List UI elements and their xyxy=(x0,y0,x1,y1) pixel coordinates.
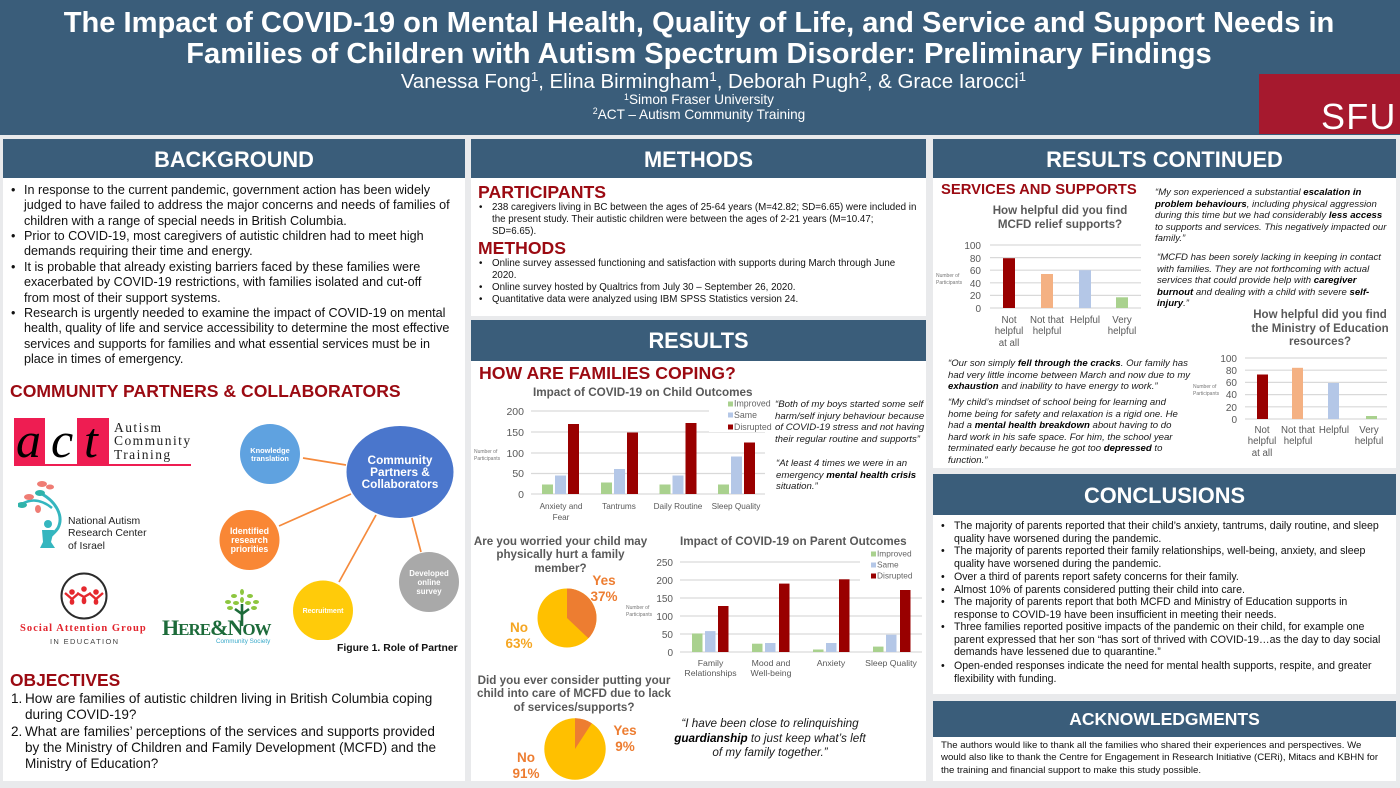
question: care of MCFD: child into care of MCFD due to lack xyxy=(477,687,671,700)
bar chart: MCFD relief supports xyxy=(936,241,1141,349)
bar chart: parent outcomes: Relationships xyxy=(684,668,737,678)
bar chart: MCFD relief supports: 80 xyxy=(970,254,981,265)
bar chart: MCFD relief supports: 40 xyxy=(970,279,981,290)
community partners heading: COMMUNITY PARTNERS & COLLABORATORS xyxy=(10,381,401,401)
panel: conclusions body: • xyxy=(941,584,945,596)
participants text: 238 caregivers living in BC between the ages of 25-64 years (M=42.82; SD=6.65) were included in xyxy=(492,202,916,213)
quote: self harm: of COVID-19 stress and not having xyxy=(775,422,924,433)
question: worried: Are you worried your child may xyxy=(474,534,647,548)
how are families coping heading: HOW ARE FAMILIES COPING? xyxy=(479,363,736,383)
quote: fell through the cracks: had very little income between March and now due to my xyxy=(948,370,1190,381)
background bullet list: Prior to COVID-19, most caregivers of autistic children had to meet high xyxy=(24,229,424,243)
background bullet list: place in times of emergency. xyxy=(24,352,183,366)
node: community partners and collaborators: Community xyxy=(368,453,433,467)
panel: conclusions body xyxy=(933,515,1396,694)
panel: results heading: RESULTS xyxy=(648,328,749,353)
bar chart: child outcomes: 200 xyxy=(506,406,524,418)
quote: mental health breakdown: “My child’s mindset of school being for learning and xyxy=(948,397,1166,408)
bar chart: parent outcomes: 150 xyxy=(656,594,673,605)
node: knowledge translation xyxy=(240,424,300,484)
panel: conclusions body: quality have worsened during the pandemic. xyxy=(954,558,1161,570)
bar chart: child outcomes: Anxiety and xyxy=(540,502,583,511)
SFU logo xyxy=(1259,74,1400,134)
acknowledgments text xyxy=(941,740,1378,776)
background bullet list xyxy=(11,183,450,366)
pie chart: care of MCFD: Yes xyxy=(613,723,637,738)
logo: Social Attention Group in Education xyxy=(20,572,147,646)
logo: Here and Now Community Society xyxy=(162,589,272,645)
logo: National Autism Research Center of Israel: National Autism xyxy=(68,516,140,526)
panel: methods heading xyxy=(471,139,926,178)
bar chart: Ministry of Education resources: 40 xyxy=(1226,390,1237,401)
quote: self harm xyxy=(775,399,924,445)
quote: guardianship: “I have been close to relinquishing xyxy=(681,717,859,730)
chart title: Ministry of Education: resources? xyxy=(1289,336,1351,348)
node: knowledge translation: translation xyxy=(251,454,289,463)
bar chart: child outcomes: 50 xyxy=(512,468,524,480)
bar chart: MCFD relief supports: 60 xyxy=(970,266,981,277)
quote: mental health breakdown: had a mental health breakdown about having to do xyxy=(948,420,1171,431)
panel: results continued heading: RESULTS CONTINUED xyxy=(1046,147,1283,172)
quote: escalation: during this time but we had considerably less access xyxy=(1155,210,1382,221)
title xyxy=(64,7,1334,70)
logo: Here and Now Community Society: Community Society xyxy=(216,638,270,645)
bar chart: parent outcomes: 250 xyxy=(656,558,673,569)
panel: results heading xyxy=(471,320,926,361)
title: Families of Children with Autism Spectrum Disorder: Preliminary Findings xyxy=(186,38,1212,70)
node: identified research priorities: priorities xyxy=(231,544,268,554)
bar chart: parent outcomes: Well-being xyxy=(751,668,792,678)
bar chart: child outcomes: Tantrums xyxy=(602,502,636,511)
objectives list: Ministry of Education? xyxy=(25,756,158,771)
panel: conclusions body: demands have lessened due to quarantine.” xyxy=(954,646,1161,658)
panel: conclusions body: • xyxy=(941,571,945,583)
bar chart: MCFD relief supports: 0 xyxy=(975,304,981,315)
logo: ACT Autism Community Training: t xyxy=(84,412,98,468)
chart title: child outcomes: Impact of COVID-19 on Child Outcomes xyxy=(533,386,752,399)
panel: background heading xyxy=(3,139,465,178)
logo: ACT Autism Community Training xyxy=(14,412,192,468)
question: care of MCFD xyxy=(477,674,671,714)
quote: guardianship xyxy=(674,717,866,759)
bar chart: parent outcomes: Mood and xyxy=(752,658,790,668)
bar chart: MCFD relief supports: helpful xyxy=(995,326,1023,337)
acknowledgments text: would also like to thank the Centre for Engagement in Research Initiative (CERi), Mitacs and KBHN for xyxy=(941,752,1378,763)
bar chart: Ministry of Education resources: Helpful xyxy=(1319,425,1349,436)
methods list: Online survey assessed functioning and satisfaction with supports during March through June xyxy=(492,258,895,269)
quote: escalation: family.” xyxy=(1155,233,1185,244)
quote: mental health crisis: “At least 4 times we were in an xyxy=(776,458,907,469)
header banner xyxy=(0,0,1400,135)
services and supports heading: SERVICES AND SUPPORTS xyxy=(941,182,1137,198)
panel: results continued body xyxy=(933,178,1396,468)
pie chart: worried: 37% xyxy=(590,589,618,604)
background bullet list: • xyxy=(11,260,15,274)
pie chart: care of MCFD xyxy=(512,718,637,781)
bar chart: Ministry of Education resources: Participants xyxy=(1193,391,1220,397)
node: recruitment: Recruitment xyxy=(303,608,344,615)
logo: National Autism Research Center of Israel xyxy=(18,481,147,552)
question: worried: member? xyxy=(534,562,587,574)
quote: MCFD lacking: burnout and dealing with a child with severe self- xyxy=(1157,286,1369,298)
quote: escalation xyxy=(1154,187,1387,244)
bar chart: child outcomes: Disrupted xyxy=(734,422,772,432)
panel: acknowledgments heading xyxy=(933,701,1396,737)
node: identified research priorities xyxy=(220,510,280,570)
bar chart: MCFD relief supports: helpful xyxy=(1033,326,1061,337)
participants text xyxy=(479,202,916,237)
chart title: MCFD: MCFD relief supports? xyxy=(998,218,1122,230)
chart title: Ministry of Education: How helpful did you find xyxy=(1253,309,1387,321)
pie chart: care of MCFD: 9% xyxy=(615,739,635,754)
panel: conclusions body: The majority of parents report that both MCFD and Ministry of Education supports in xyxy=(954,596,1347,608)
objectives list: How are families of autistic children living in British Columbia coping xyxy=(25,691,432,706)
bar chart: MCFD relief supports: Not xyxy=(1001,315,1017,326)
logo: National Autism Research Center of Israel: Research Center xyxy=(68,528,147,539)
quote: self harm: harm/self injury behaviour because xyxy=(775,411,924,422)
chart title: MCFD xyxy=(993,204,1127,230)
quote: escalation: to supports and services. This negatively impacted our xyxy=(1155,222,1386,233)
methods list: • xyxy=(479,294,482,305)
background bullet list: • xyxy=(11,183,15,197)
objectives list: 2. xyxy=(11,724,22,739)
quote: escalation: “My son experienced a substantial escalation in xyxy=(1155,187,1361,198)
bar chart: MCFD relief supports: Helpful xyxy=(1070,315,1100,326)
node: community partners and collaborators: Partners & xyxy=(370,465,430,479)
bar chart: Ministry of Education resources: 100 xyxy=(1220,354,1237,365)
methods list: Quantitative data were analyzed using IBM SPSS Statistics version 24. xyxy=(492,294,798,305)
bar chart: Ministry of Education resources: 80 xyxy=(1226,366,1237,377)
quote: MCFD lacking: services that could provide help with caregiver xyxy=(1157,275,1356,286)
participants text: SD=6.65). xyxy=(492,226,536,237)
node: identified research priorities: Identified xyxy=(230,526,269,536)
affiliations: 2ACT – Autism Community Training xyxy=(593,106,805,122)
quote: fell through the cracks: exhaustion and inability to have energy to work.” xyxy=(948,381,1158,392)
background bullet list: health, quality of life and service accessibility to determine the most effective xyxy=(24,321,449,335)
quote: mental health breakdown: hard work in his safe space. For him, the school year xyxy=(948,432,1172,442)
panel: results body xyxy=(471,361,926,781)
acknowledgments text: The authors would like to thank all the families who shared their experiences and perspectives. We xyxy=(941,740,1361,751)
chart title: MCFD: How helpful did you find xyxy=(993,204,1127,217)
question: care of MCFD: Did you ever consider putting your xyxy=(478,674,670,686)
objectives heading: OBJECTIVES xyxy=(10,670,120,690)
panel: conclusions body: Over a third of parents report safety concerns for their family. xyxy=(954,571,1239,583)
node: community partners and collaborators: Collaborators xyxy=(362,477,439,491)
panel: conclusions body: response to COVID-19 have been insufficient in meeting their needs. xyxy=(954,609,1277,621)
objectives list xyxy=(11,691,436,771)
bar chart: MCFD relief supports: Participants xyxy=(936,280,963,286)
bar chart: child outcomes xyxy=(474,398,772,522)
node: knowledge translation: Knowledge xyxy=(250,446,290,455)
background bullet list: It is probable that already existing barriers faced by these families were xyxy=(24,260,420,274)
methods list xyxy=(479,258,895,305)
panel: conclusions body: • xyxy=(941,660,945,672)
quote: MCFD lacking: with families. They are not forthcoming with actual xyxy=(1157,264,1369,274)
bar chart: Ministry of Education resources: 0 xyxy=(1231,415,1237,426)
background bullet list: children with a range of special needs in British Columbia. xyxy=(24,214,347,228)
pie chart: worried: No xyxy=(510,620,528,635)
bar chart: parent outcomes xyxy=(626,548,922,678)
quote: mental health breakdown: home being for safety and relaxation is a rigid one. He xyxy=(948,408,1178,420)
panel: acknowledgments heading: ACKNOWLEDGMENTS xyxy=(1069,709,1260,729)
node: developed online survey: online xyxy=(418,578,441,587)
title: The Impact of COVID-19 on Mental Health, Quality of Life, and Service and Support Needs in xyxy=(64,7,1334,39)
logo: ACT Autism Community Training: c xyxy=(51,412,73,468)
background bullet list: exacerbated by COVID-19 restrictions, with families isolated and cut-off xyxy=(24,275,421,289)
panel: conclusions body: The majority of parents reported that their child’s anxiety, tantrums, daily routine, and sleep xyxy=(954,520,1379,532)
bar chart: parent outcomes: Sleep Quality xyxy=(865,658,917,668)
background bullet list: demands requiring their time and energy. xyxy=(24,244,253,258)
quote: mental health breakdown: terminated early because he got too depressed to xyxy=(948,443,1162,454)
background bullet list: Research is urgently needed to examine the impact of COVID-19 on mental xyxy=(24,306,445,320)
bar chart: MCFD relief supports: at all xyxy=(999,338,1019,349)
quote: fell through the cracks: “Our son simply fell through the cracks. Our family has xyxy=(948,358,1188,369)
bar chart: parent outcomes: 50 xyxy=(662,630,673,641)
bar chart: Ministry of Education resources: Number of xyxy=(1193,384,1217,390)
authors: Vanessa Fong1, Elina Birmingham1, Deborah Pugh2, & Grace Iarocci1 xyxy=(401,69,1026,93)
quote: self harm: their regular routine and supports” xyxy=(775,434,920,445)
objectives list: What are families’ perceptions of the services and supports provided xyxy=(25,724,435,739)
node: developed online survey: survey xyxy=(416,587,442,596)
methods list: • xyxy=(479,258,482,269)
affiliations: 1Simon Fraser University xyxy=(624,92,774,107)
panel: conclusions body: Three families reported positive impacts of the pandemic on their child, for example one xyxy=(954,621,1364,633)
quote: MCFD lacking: “MCFD has been sorely lacking in keeping in contact xyxy=(1157,252,1381,263)
objectives list: during COVID-19? xyxy=(25,707,136,722)
diagram: role of partner xyxy=(220,424,459,640)
pie chart: care of MCFD: No xyxy=(517,750,535,765)
bar chart: child outcomes: Fear xyxy=(553,513,570,522)
panel: conclusions body: quality have worsened during the pandemic. xyxy=(954,533,1161,545)
bar chart: parent outcomes: 0 xyxy=(667,648,673,659)
panel: conclusions heading xyxy=(933,474,1396,515)
methods list: Online survey hosted by Qualtrics from July 30 – September 26, 2020. xyxy=(492,282,796,293)
methods list: • xyxy=(479,282,482,293)
participants heading: PARTICIPANTS xyxy=(478,182,606,202)
node: recruitment xyxy=(293,580,353,640)
chart title: parent outcomes: Impact of COVID-19 on Parent Outcomes xyxy=(680,535,907,548)
quote: guardianship: of my family together.” xyxy=(712,746,828,759)
methods list: 2020. xyxy=(492,270,516,281)
bar chart: parent outcomes: Family xyxy=(698,658,724,668)
bar chart: Ministry of Education resources xyxy=(1193,354,1387,459)
bar chart: parent outcomes: Participants xyxy=(626,612,653,618)
quote: MCFD lacking xyxy=(1157,252,1382,309)
panel: methods heading: METHODS xyxy=(644,147,753,172)
bar chart: child outcomes: Participants xyxy=(474,456,501,462)
quote: mental health crisis xyxy=(776,458,916,492)
pie chart: worried xyxy=(505,573,618,651)
quote: self harm: “Both of my boys started some self xyxy=(775,399,923,410)
node: developed online survey: Developed xyxy=(409,569,449,578)
acknowledgments text: the training and financial support to make this study possible. xyxy=(941,765,1201,776)
logo: Social Attention Group in Education: IN EDUCATION xyxy=(50,637,119,646)
bar chart: MCFD relief supports: 100 xyxy=(964,241,981,252)
logo: ACT Autism Community Training: Training xyxy=(114,447,172,462)
bar chart: parent outcomes: 200 xyxy=(656,576,673,587)
bar chart: parent outcomes: Same xyxy=(877,560,899,570)
bar chart: child outcomes: 0 xyxy=(518,489,524,501)
objectives list: by the Ministry of Children and Family Development (MCFD) and the xyxy=(25,740,436,755)
panel: conclusions body: • xyxy=(941,520,945,532)
participants text: • xyxy=(479,202,482,213)
panel: conclusions body: parent expressed that her son “has sort of thrived with COVID-19…as the day to day social xyxy=(954,634,1380,646)
background bullet list: In response to the current pandemic, government action has been widely xyxy=(24,183,430,197)
methods subheading: METHODS xyxy=(478,238,566,258)
bar chart: MCFD relief supports: Very xyxy=(1112,315,1132,326)
chart title: Ministry of Education xyxy=(1251,309,1389,348)
bar chart: MCFD relief supports: Not that xyxy=(1030,315,1064,326)
panel: conclusions body: • xyxy=(941,545,945,557)
question: worried: physically hurt a family xyxy=(496,548,625,561)
bar chart: Ministry of Education resources: at all xyxy=(1252,448,1272,459)
panel: conclusions body: • xyxy=(941,621,945,633)
background bullet list: • xyxy=(11,306,15,320)
bar chart: child outcomes: Same xyxy=(734,410,757,420)
quote: guardianship: guardianship to just keep what’s left xyxy=(674,732,866,744)
panel: left column xyxy=(3,178,465,781)
quote: fell through the cracks xyxy=(948,358,1190,392)
participants text: the present study. Their autistic children were between the ages of 2-21 years (M=10.47; xyxy=(492,214,873,225)
quote: escalation: problem behaviours, including physical aggression xyxy=(1155,199,1377,210)
question: worried xyxy=(474,534,648,574)
bar chart: Ministry of Education resources: 60 xyxy=(1226,378,1237,389)
bar chart: parent outcomes: Anxiety xyxy=(817,658,846,668)
bar chart: Ministry of Education resources: helpful xyxy=(1248,436,1276,447)
logo: National Autism Research Center of Israel: of Israel xyxy=(68,541,105,552)
quote: mental health breakdown: function.” xyxy=(948,454,987,466)
bar chart: child outcomes: 150 xyxy=(506,427,524,439)
bar chart: MCFD relief supports: 20 xyxy=(970,291,981,302)
logo: ACT Autism Community Training: Autism xyxy=(114,420,162,435)
bar chart: Ministry of Education resources: 20 xyxy=(1226,403,1237,414)
pie chart: worried: Yes xyxy=(592,573,616,588)
bar chart: child outcomes: Number of xyxy=(474,449,498,455)
bar chart: child outcomes: Improved xyxy=(734,398,771,408)
pie chart: care of MCFD: 91% xyxy=(512,766,540,781)
logo: Here and Now Community Society: HERE&NOW xyxy=(162,615,271,640)
bar chart: child outcomes: Sleep Quality xyxy=(712,502,761,511)
bar chart: child outcomes: 100 xyxy=(506,448,524,460)
bar chart: Ministry of Education resources: helpful xyxy=(1284,436,1312,447)
objectives list: 1. xyxy=(11,691,22,706)
chart title: Ministry of Education: the Ministry of Education xyxy=(1251,322,1389,334)
quote: mental health crisis: situation.” xyxy=(776,481,818,492)
node: identified research priorities: research xyxy=(231,535,268,545)
bar chart: Ministry of Education resources: Not xyxy=(1254,425,1270,436)
affiliations xyxy=(593,92,805,122)
panel: conclusions heading: CONCLUSIONS xyxy=(1084,483,1245,508)
bar chart: child outcomes: Daily Routine xyxy=(654,502,703,511)
bar chart: parent outcomes: Disrupted xyxy=(877,570,913,580)
question: care of MCFD: of services/supports? xyxy=(514,700,634,714)
logo: Social Attention Group in Education: Social Attention Group xyxy=(20,623,147,634)
logo: ACT Autism Community Training: a xyxy=(16,412,41,468)
panel: conclusions body: • xyxy=(941,596,945,608)
quote: MCFD lacking: injury.” xyxy=(1157,298,1189,309)
background bullet list: judged to have failed to address the major concerns and needs of families of xyxy=(24,198,450,212)
bar chart: parent outcomes: Improved xyxy=(877,548,912,558)
panel: conclusions body: Open-ended responses indicate the need for mental health supports, respite, and greater xyxy=(954,660,1372,672)
figure caption: Figure 1. Role of Partner xyxy=(337,643,458,654)
background bullet list: from most of their support systems. xyxy=(24,291,221,305)
bar chart: parent outcomes: Number of xyxy=(626,605,650,611)
bar chart: Ministry of Education resources: helpful xyxy=(1355,436,1383,447)
bar chart: Ministry of Education resources: Not that xyxy=(1281,425,1315,436)
bar chart: MCFD relief supports: Number of xyxy=(936,273,960,279)
quote: mental health crisis: emergency mental health crisis xyxy=(776,470,916,481)
node: developed online survey xyxy=(399,552,459,612)
panel: results continued heading xyxy=(933,139,1396,178)
bar chart: MCFD relief supports: helpful xyxy=(1108,326,1136,337)
pie chart: worried: 63% xyxy=(505,636,533,651)
panel: conclusions body: flexibility with funding. xyxy=(954,673,1056,685)
panel: methods body xyxy=(471,178,926,316)
panel: acknowledgments body xyxy=(933,737,1396,781)
background bullet list: services and supports for families and what essential services must be in xyxy=(24,337,430,351)
panel: conclusions body: Almost 10% of parents considered putting their child into care. xyxy=(954,584,1245,596)
panel: background heading: BACKGROUND xyxy=(154,147,314,172)
panel: conclusions body: The majority of parents reported their family relationships, well-being, anxiety, and sleep xyxy=(954,545,1365,557)
node: community partners and collaborators xyxy=(346,426,454,518)
bar chart: Ministry of Education resources: Very xyxy=(1359,425,1379,436)
logo: ACT Autism Community Training: Community xyxy=(114,433,192,448)
background bullet list: • xyxy=(11,229,15,243)
bar chart: parent outcomes: 100 xyxy=(656,612,673,623)
quote: mental health breakdown xyxy=(948,397,1178,466)
